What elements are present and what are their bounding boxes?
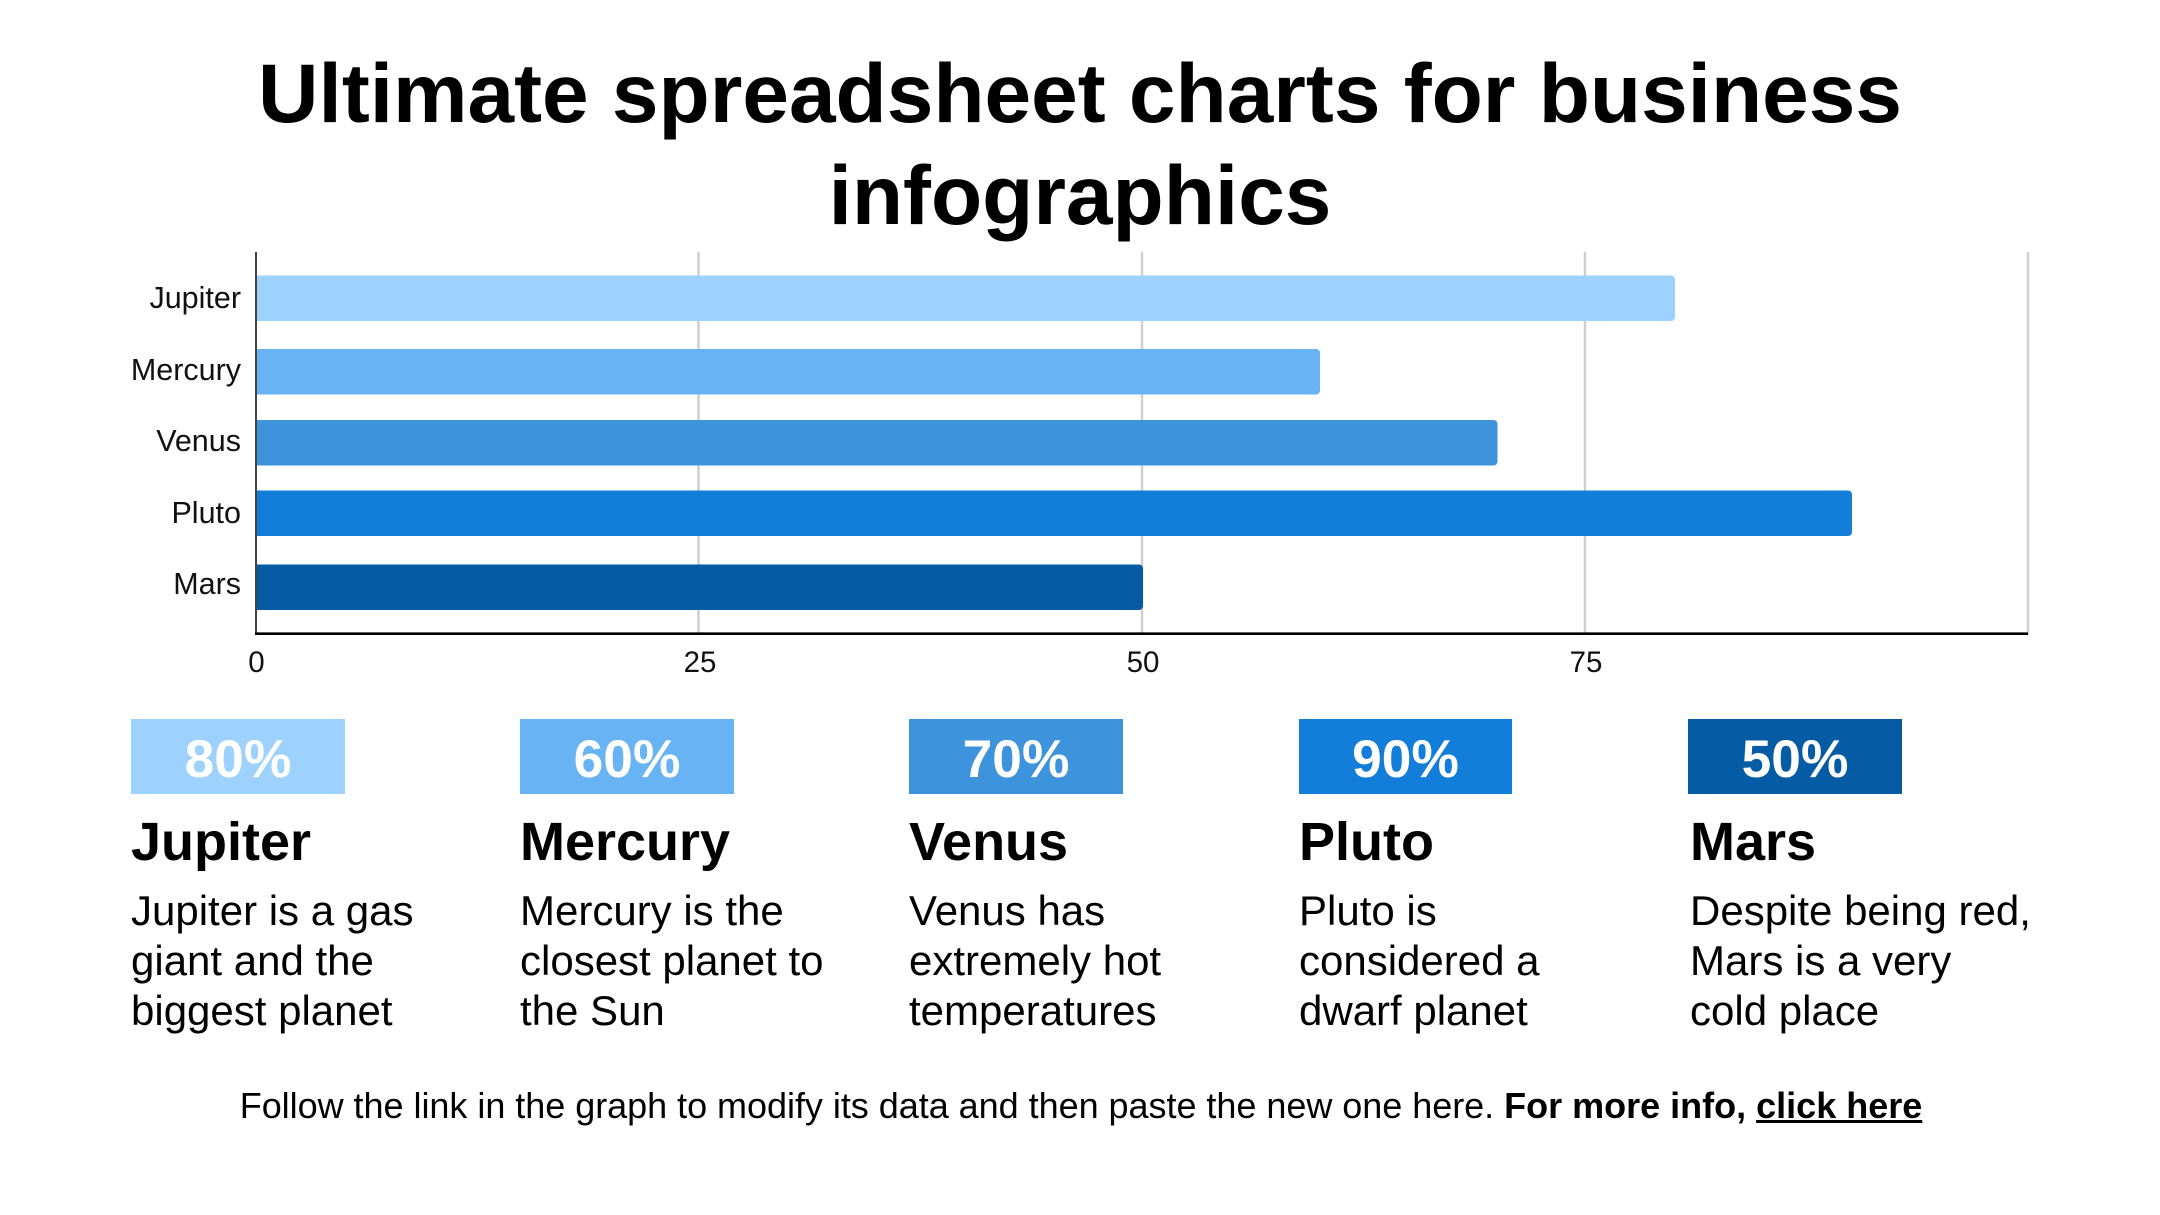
percentage badge	[909, 719, 1123, 794]
bar chart	[131, 252, 2030, 679]
panel: Mars	[1688, 719, 2031, 1034]
description: biggest planet	[131, 987, 393, 1034]
description: closest planet to	[520, 937, 824, 984]
category labels: Mars	[173, 567, 241, 601]
panel: Pluto	[1299, 719, 1540, 1034]
value axis labels: 25	[684, 646, 716, 679]
description: Pluto is	[1299, 886, 1437, 934]
percentage badge	[131, 719, 345, 794]
percentage badge: 80%	[185, 730, 291, 789]
description: giant and the	[131, 937, 374, 984]
description	[520, 886, 824, 1034]
description: Venus has	[909, 886, 1105, 934]
percentage badge	[1299, 719, 1512, 794]
value axis labels: 0	[248, 646, 265, 679]
heading: Pluto	[1299, 812, 1434, 872]
description: the Sun	[520, 987, 665, 1034]
percentage badge: 70%	[963, 730, 1069, 789]
description: Jupiter is a gas	[131, 886, 413, 934]
title: Ultimate spreadsheet charts for business	[258, 46, 1902, 140]
percentage badge	[1688, 719, 1902, 794]
title: infographics	[829, 148, 1331, 242]
title	[258, 46, 1902, 242]
bar: Mars	[256, 564, 1143, 610]
heading: Jupiter	[131, 812, 311, 872]
description: cold place	[1690, 987, 1879, 1034]
description: temperatures	[909, 987, 1156, 1034]
value axis labels: 75	[1570, 646, 1602, 679]
description: extremely hot	[909, 937, 1161, 984]
description: Mercury is the	[520, 886, 784, 934]
panel: Jupiter	[131, 719, 413, 1034]
category labels: Jupiter	[149, 281, 241, 315]
value axis labels	[248, 646, 1602, 679]
footer note: Follow the link in the graph to modify its data and then paste the new one here. For more info, click here	[240, 1085, 1922, 1126]
percentage badge: 90%	[1352, 730, 1459, 789]
description: considered a	[1299, 937, 1540, 984]
description	[909, 886, 1161, 1034]
category labels: Pluto	[171, 496, 241, 530]
bar: Jupiter	[256, 276, 1675, 321]
description: dwarf planet	[1299, 987, 1528, 1034]
percentage badge: 50%	[1742, 730, 1848, 789]
bar: Venus	[256, 420, 1498, 466]
description	[131, 886, 413, 1034]
category labels	[131, 281, 242, 601]
category labels: Mercury	[131, 353, 242, 387]
percentage badge: 60%	[574, 730, 680, 789]
description	[1299, 886, 1540, 1034]
bar: Pluto	[256, 490, 1852, 536]
category labels: Venus	[156, 424, 241, 458]
value axis labels: 50	[1127, 646, 1159, 679]
heading: Mercury	[520, 812, 730, 872]
description	[1690, 886, 2031, 1034]
percentage badge	[520, 719, 734, 794]
panel: Venus	[909, 719, 1161, 1034]
description: Mars is a very	[1690, 937, 1951, 984]
heading: Venus	[909, 812, 1068, 872]
panel: Mercury	[520, 719, 824, 1034]
description: Despite being red,	[1690, 886, 2031, 934]
heading: Mars	[1690, 812, 1816, 872]
bar: Mercury	[256, 349, 1320, 394]
